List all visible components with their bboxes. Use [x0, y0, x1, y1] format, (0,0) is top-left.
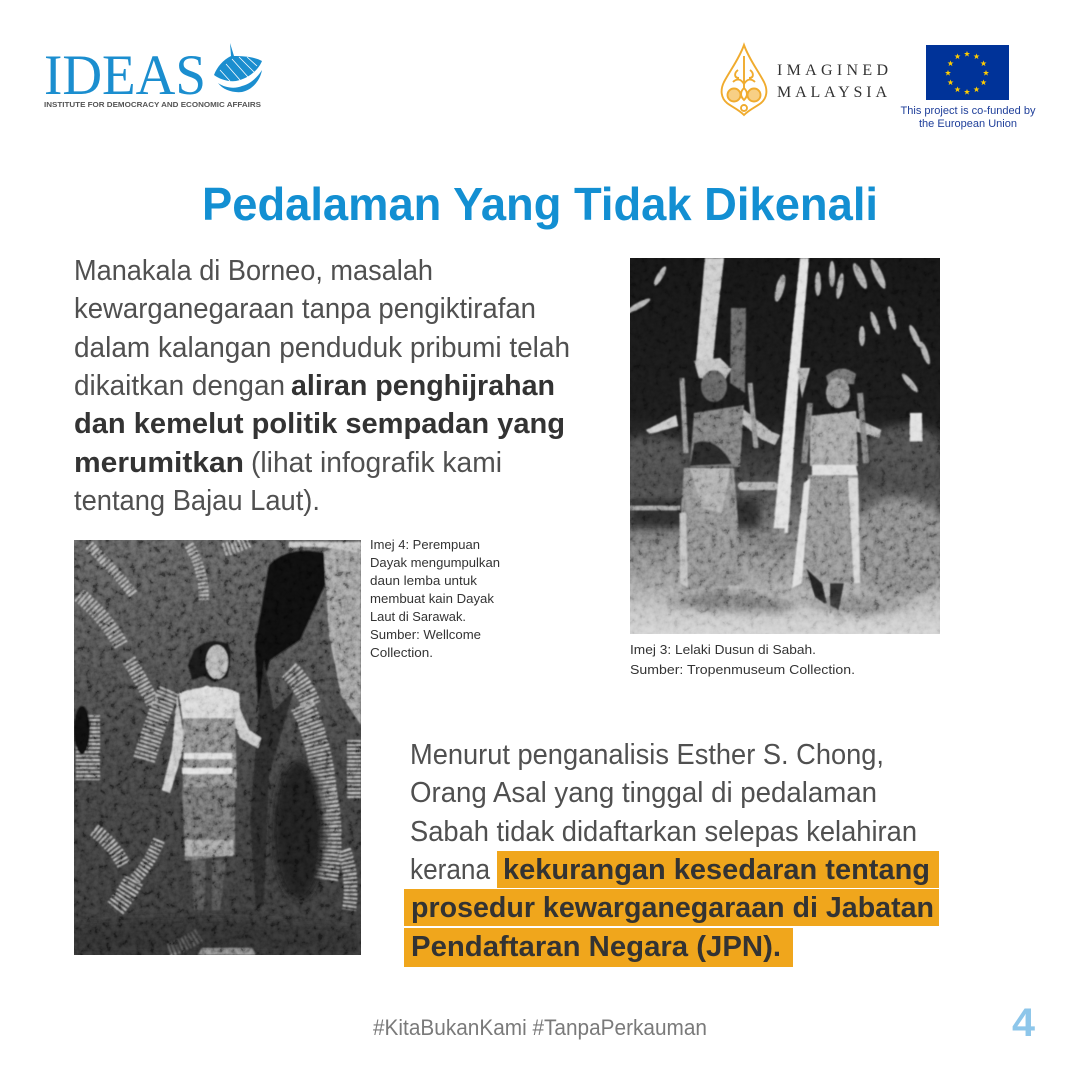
logo: EU flag and co-funding note [900, 45, 1036, 130]
text block: intro paragraph: tentang Bajau Laut). [74, 485, 320, 517]
page number: 4 [1012, 1001, 1036, 1045]
text block: Esther Chong paragraph: Sabah tidak didaftarkan selepas kelahiran [410, 816, 917, 848]
logo: EU flag and co-funding note: the European Union [919, 118, 1017, 130]
footer hashtags: #KitaBukanKami #TanpaPerkauman [373, 1015, 707, 1040]
logo: IDEAS: INSTITUTE FOR DEMOCRACY AND ECONOMIC AFFAIRS [44, 100, 261, 109]
text block: intro paragraph: dikaitkan dengan [74, 370, 285, 402]
text block: Esther Chong paragraph: Menurut penganalisis Esther S. Chong, [410, 739, 884, 771]
text block: intro paragraph: aliran penghijrahan [291, 370, 555, 402]
caption: image 4: Dayak mengumpulkan [370, 555, 500, 570]
caption: image 3: Imej 3: Lelaki Dusun di Sabah. [630, 642, 816, 657]
text block: Esther Chong paragraph [410, 739, 917, 886]
text block: intro paragraph: dalam kalangan penduduk pribumi telah [74, 332, 570, 364]
logo: Imagined Malaysia: IMAGINED [777, 62, 888, 79]
logo: EU flag and co-funding note: This project is co-funded by [900, 105, 1036, 117]
caption: image 4: membuat kain Dayak [370, 591, 494, 606]
text block: Esther Chong paragraph: Orang Asal yang tinggal di pedalaman [410, 777, 877, 809]
icon: wayang kulit emblem [722, 45, 766, 115]
text block: intro paragraph: Manakala di Borneo, masalah [74, 255, 433, 287]
logo: Imagined Malaysia [722, 45, 888, 115]
caption: image 4: Imej 4: Perempuan [370, 537, 480, 552]
logo: IDEAS: IDEAS [44, 44, 206, 107]
text block: intro paragraph: kewarganegaraan tanpa pengiktirafan [74, 293, 536, 325]
callout: highlighted finding: kekurangan kesedaran tentang [503, 854, 930, 886]
big dark leaf [255, 551, 325, 705]
figure: woman [162, 641, 261, 910]
text block: Esther Chong paragraph: kerana [410, 854, 491, 886]
text block: intro paragraph: dan kemelut politik sempadan yang [74, 408, 565, 440]
text block: intro paragraph: (lihat infografik kami [251, 447, 502, 479]
title: Pedalaman Yang Tidak Dikenali [202, 178, 878, 230]
caption: image 3: Sumber: Tropenmuseum Collection. [630, 662, 855, 677]
caption: image 4: Laut di Sarawak. [370, 609, 466, 624]
callout: highlighted finding: prosedur kewarganegaraan di Jabatan [411, 892, 934, 924]
text block: intro paragraph [74, 255, 570, 517]
caption: image 3 [630, 642, 855, 677]
caption: image 4: daun lemba untuk [370, 573, 478, 588]
caption: image 4: Collection. [370, 645, 433, 660]
text block: intro paragraph: merumitkan [74, 447, 244, 479]
figure: right man [792, 368, 881, 624]
logo: Imagined Malaysia: MALAYSIA [777, 84, 887, 101]
callout: highlighted finding [404, 851, 939, 967]
callout: highlighted finding: Pendaftaran Negara (JPN). [411, 931, 781, 963]
photo: Dusun men in Sabah [614, 258, 950, 634]
figure: left man [646, 358, 780, 614]
caption: image 4 [370, 537, 500, 660]
caption: image 4: Sumber: Wellcome [370, 627, 481, 642]
photo: Dayak woman gathering leaves [74, 540, 361, 955]
